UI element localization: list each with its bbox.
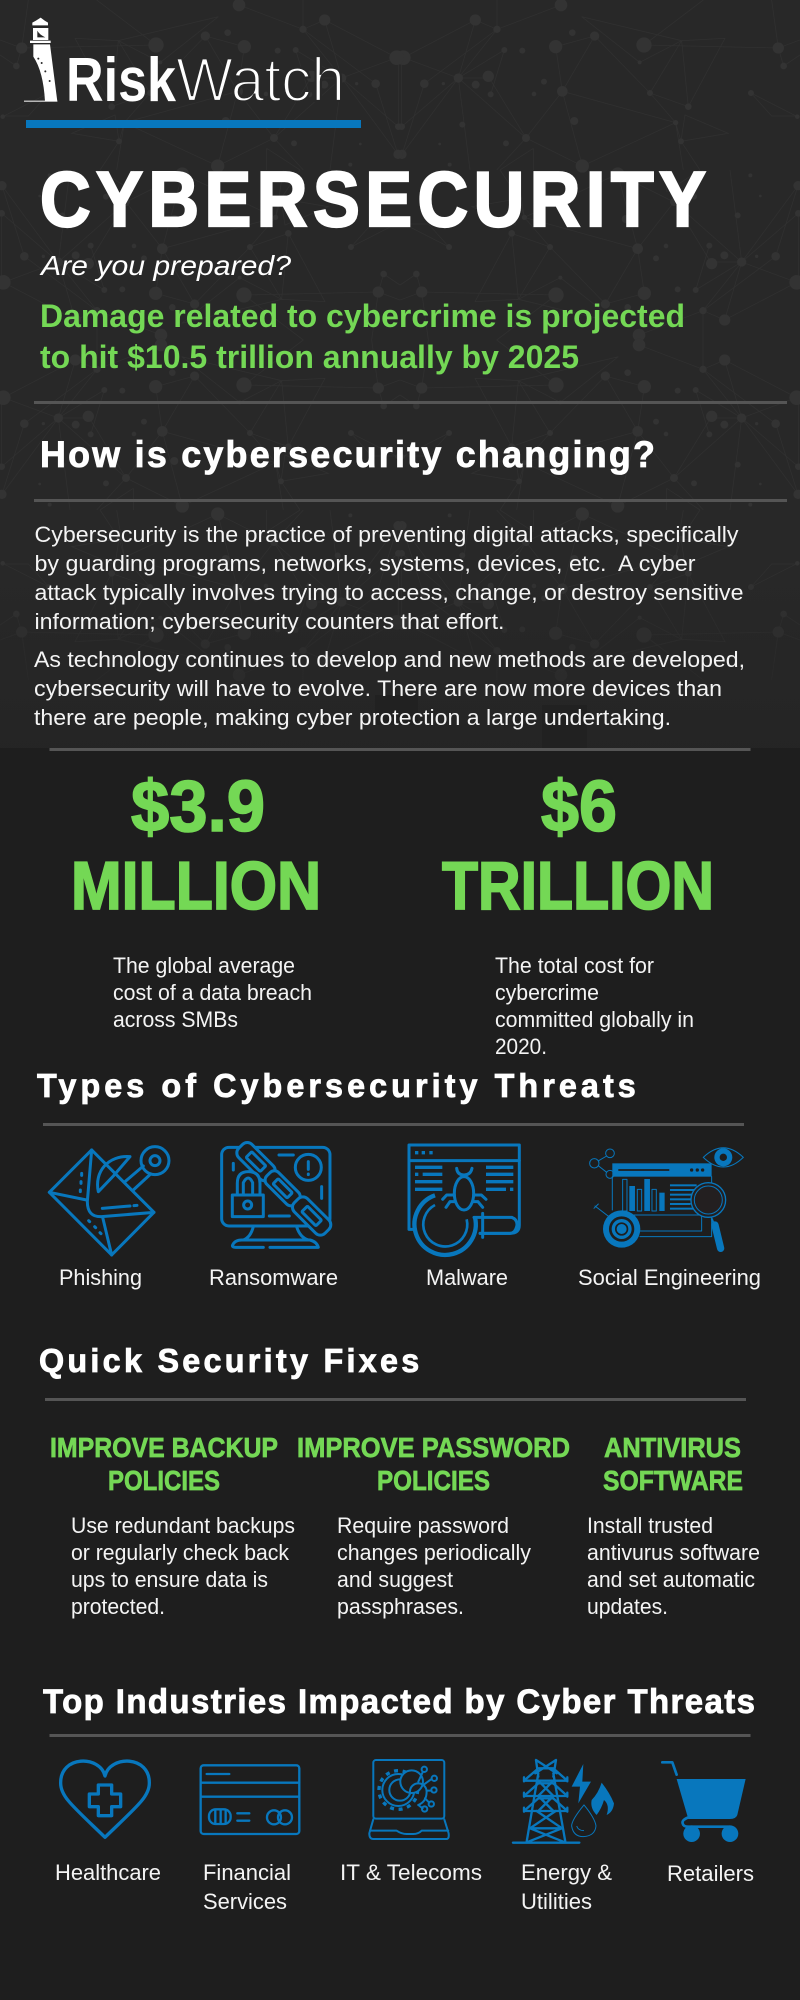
logo: RiskWatch: [24, 18, 345, 115]
fix: password policies: and suggest: [337, 1567, 453, 1592]
stat description: data breach: cost of a data breach: [113, 980, 312, 1005]
stat: $3.9 million: MILLION: [71, 848, 321, 924]
label: financial services: [203, 1860, 291, 1914]
intro paragraph one: attack typically involves trying to access, change, or destroy sensitive: [34, 580, 744, 605]
fix: backup policies: POLICIES: [108, 1465, 220, 1496]
fix: password policies: [297, 1432, 570, 1619]
headline damage projection: [40, 298, 685, 375]
stat description: data breach: across SMBs: [113, 1007, 238, 1032]
stat description: cybercrime cost: [495, 953, 694, 1059]
intro paragraph two: there are people, making cyber protection a large undertaking.: [34, 705, 671, 730]
fix: backup policies: ups to ensure data is: [71, 1567, 268, 1592]
fix: antivirus software: SOFTWARE: [603, 1465, 743, 1496]
fix: backup policies: [50, 1432, 295, 1619]
logo wordmark: Watch: [176, 46, 345, 115]
heading: how is cybersecurity changing: How is cybersecurity changing?: [40, 434, 655, 475]
fix: backup policies: IMPROVE BACKUP: [50, 1432, 278, 1463]
heading: quick security fixes: Quick Security Fixes: [39, 1342, 419, 1379]
fix: antivirus software: [587, 1432, 760, 1619]
label: financial services: Services: [203, 1889, 287, 1914]
icon: financial card: [201, 1765, 299, 1834]
logo wordmark: Risk: [66, 46, 176, 115]
fix: backup policies: Use redundant backups: [71, 1513, 295, 1538]
stat description: cybercrime cost: 2020.: [495, 1034, 547, 1059]
icon: healthcare heart: [61, 1761, 149, 1837]
label: ransomware: Ransomware: [209, 1265, 338, 1290]
title: CYBERSECURITY: [40, 156, 706, 243]
intro paragraph one: by guarding programs, networks, systems, devices, etc. A cyber: [34, 551, 695, 576]
logo underline bar: [26, 120, 361, 128]
icon: energy and utilities: [513, 1760, 614, 1843]
icon: retail cart: [662, 1762, 746, 1842]
headline damage projection: to hit $10.5 trillion annually by 2025: [40, 339, 579, 375]
fix: antivirus software: updates.: [587, 1594, 668, 1619]
fix: antivirus software: Install trusted: [587, 1513, 713, 1538]
stat description: data breach: The global average: [113, 953, 295, 978]
label: financial services: Financial: [203, 1860, 291, 1885]
fix: backup policies: or regularly check back: [71, 1540, 290, 1565]
fix: antivirus software: antivurus software: [587, 1540, 760, 1565]
intro paragraph one: Cybersecurity is the practice of preventing digital attacks, specifically: [34, 522, 738, 547]
label: IT and telecoms: IT & Telecoms: [340, 1860, 482, 1885]
label: energy and utilities: Energy &: [521, 1860, 612, 1885]
fix: antivirus software: ANTIVIRUS: [604, 1432, 741, 1463]
fix: password policies: passphrases.: [337, 1594, 464, 1619]
intro paragraph one: information; cybersecurity counters that effort.: [34, 609, 505, 634]
intro paragraph one: [34, 522, 744, 634]
stat: $6 trillion: [442, 767, 714, 924]
icon: malware: [409, 1145, 519, 1255]
intro paragraph two: As technology continues to develop and new methods are developed,: [34, 647, 745, 672]
icon: phishing: [49, 1147, 169, 1255]
label: retailers: Retailers: [667, 1861, 754, 1886]
stat description: cybercrime cost: The total cost for: [495, 953, 654, 978]
stat: $6 trillion: $6: [541, 767, 617, 847]
label: energy and utilities: [521, 1860, 612, 1914]
stat: $6 trillion: TRILLION: [442, 848, 714, 924]
heading: top industries: Top Industries Impacted by Cyber Threats: [43, 1684, 755, 1721]
icon: lighthouse: [24, 18, 57, 102]
heading: types of threats: Types of Cybersecurity Threats: [37, 1067, 636, 1104]
fix: backup policies: protected.: [71, 1594, 165, 1619]
stat description: cybercrime cost: committed globally in: [495, 1007, 694, 1032]
label: social engineering: Social Engineering: [578, 1265, 761, 1290]
stat: $3.9 million: $3.9: [131, 767, 265, 847]
stat description: data breach: [113, 953, 312, 1032]
label: healthcare: Healthcare: [55, 1860, 161, 1885]
fix: antivirus software: and set automatic: [587, 1567, 755, 1592]
headline damage projection: Damage related to cybercrime is projected: [40, 298, 685, 334]
label: energy and utilities: Utilities: [521, 1889, 592, 1914]
stat description: cybercrime cost: cybercrime: [495, 980, 599, 1005]
fix: password policies: IMPROVE PASSWORD: [297, 1432, 570, 1463]
intro paragraph two: cybersecurity will have to evolve. There are now more devices than: [34, 676, 722, 701]
subtitle: Are you prepared?: [39, 250, 291, 281]
fix: password policies: changes periodically: [337, 1540, 531, 1565]
stat: $3.9 million: [71, 767, 321, 924]
label: malware: Malware: [426, 1265, 508, 1290]
label: phishing: Phishing: [59, 1265, 142, 1290]
network texture header background: [0, 0, 800, 748]
icon: social engineering: [590, 1148, 743, 1248]
fix: password policies: Require password: [337, 1513, 509, 1538]
intro paragraph two: [34, 647, 745, 730]
logo wordmark: [66, 46, 345, 115]
icon: laptop IT and telecoms: [369, 1760, 449, 1839]
icon: ransomware: [222, 1140, 334, 1247]
fix: password policies: POLICIES: [377, 1465, 490, 1496]
